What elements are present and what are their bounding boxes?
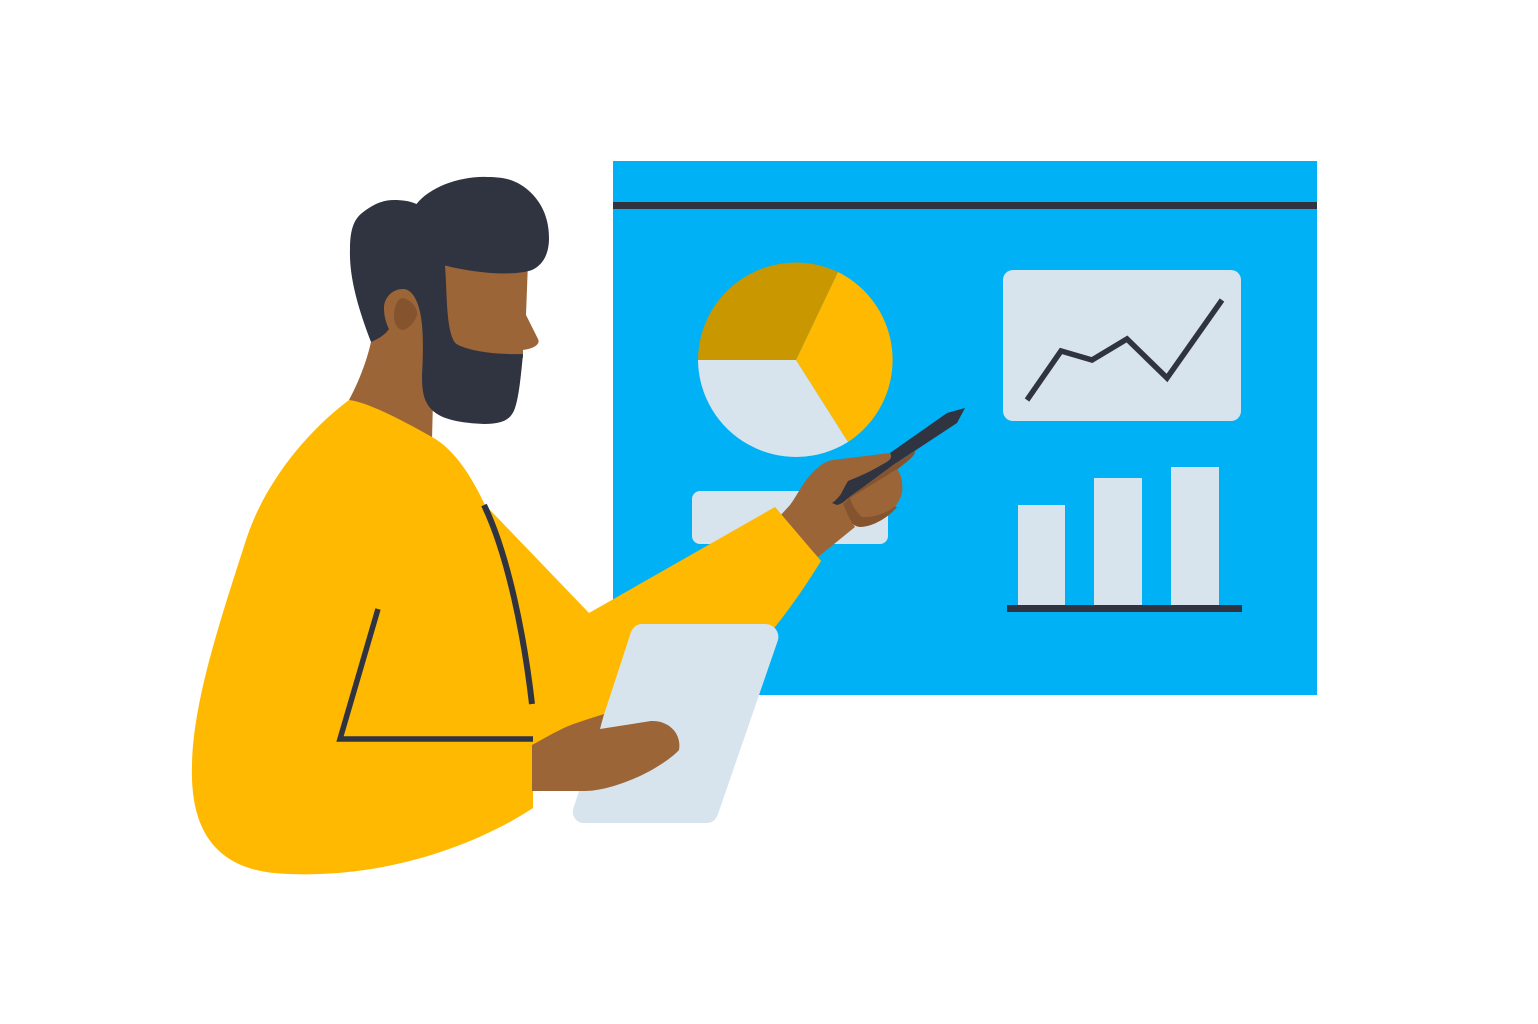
- sweater pocket line: [340, 609, 533, 739]
- yellow sweater: [192, 400, 821, 874]
- man's neck: [349, 285, 433, 440]
- stylus: [832, 408, 965, 505]
- panel: presentation screen: [613, 161, 1317, 695]
- hand holding tablet: [532, 714, 679, 791]
- ear: [384, 289, 420, 345]
- line chart card: [1003, 270, 1241, 421]
- pie chart: [698, 263, 893, 457]
- palm: [779, 453, 892, 557]
- bar chart: [1007, 467, 1242, 612]
- shaded finger: [841, 498, 897, 527]
- shadow under stylus: [847, 451, 915, 499]
- lit finger: [850, 469, 902, 517]
- sweater zipper line: [484, 505, 532, 704]
- tablet: [573, 624, 778, 823]
- hair and beard: [350, 177, 549, 424]
- legend card below pie: [692, 491, 888, 544]
- raised hand holding stylus: [779, 408, 965, 557]
- sleeve cuff over wrist: [740, 507, 821, 592]
- man's face: [440, 260, 539, 358]
